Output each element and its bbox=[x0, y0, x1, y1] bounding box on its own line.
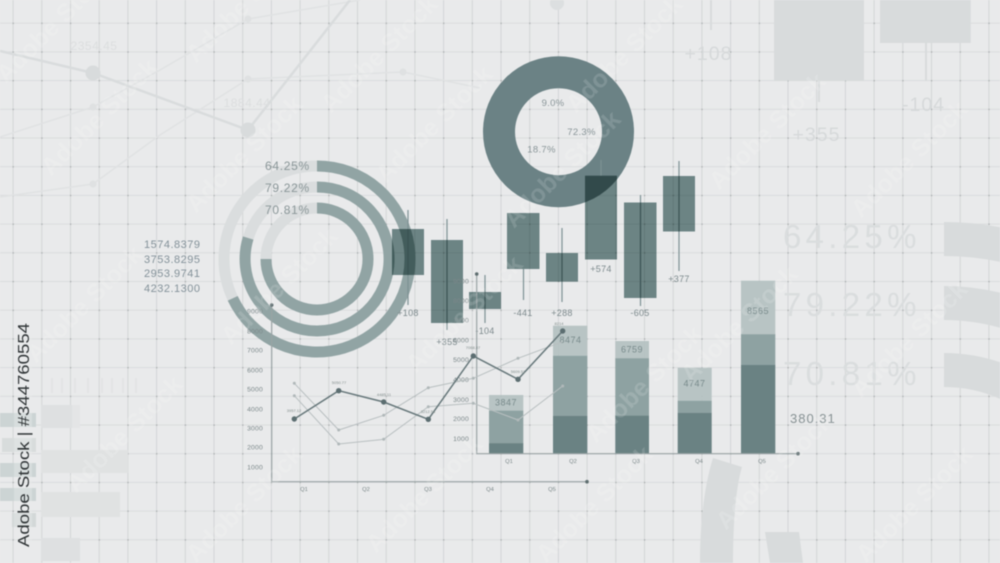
line chart: primary series: 7068.87 bbox=[466, 345, 481, 350]
watermarks: Adobe Stock bbox=[498, 105, 626, 233]
candlestick chart: -605 bbox=[630, 308, 650, 318]
bar chart axes and labels: Q2 bbox=[569, 459, 577, 465]
bar chart axes and labels: 1000 bbox=[453, 436, 469, 443]
line chart: primary series: 8214 bbox=[555, 321, 564, 326]
ghost percentages: right bbox=[783, 218, 921, 392]
watermarks: Adobe Stock bbox=[845, 275, 973, 403]
bar chart axes and labels: 6000 bbox=[453, 338, 469, 344]
ring percentage labels bbox=[265, 159, 310, 217]
bar chart axes and labels: 9000 bbox=[453, 278, 469, 286]
bar chart: stacked quarterly bars: 8474 bbox=[559, 335, 582, 345]
ghost line chart: top left: 1884.44 bbox=[224, 96, 270, 110]
line chart axes and labels: 7000 bbox=[247, 348, 263, 354]
watermarks: Adobe Stock bbox=[370, 60, 498, 188]
line chart axes and labels bbox=[247, 303, 589, 493]
ghost line chart: top left: 2354.45 bbox=[71, 39, 117, 53]
line chart: primary series: 3212.56 bbox=[421, 409, 436, 414]
watermarks: Adobe Stock bbox=[710, 407, 838, 535]
watermarks: Adobe Stock bbox=[580, 320, 708, 448]
watermarks: Adobe Stock bbox=[675, 260, 803, 388]
candlestick chart: -441 bbox=[513, 308, 533, 318]
line chart axes and labels: Q2 bbox=[362, 487, 370, 493]
bar chart: stacked quarterly bars: 3847 bbox=[495, 398, 517, 408]
donut chart bbox=[499, 72, 618, 191]
bar chart axes and labels: 7000 bbox=[453, 318, 469, 324]
line chart axes and labels: 1000 bbox=[247, 464, 263, 472]
bar chart axes and labels: Q1 bbox=[505, 459, 513, 465]
bar chart: stacked quarterly bars: 6759 bbox=[621, 344, 643, 354]
bar chart axes and labels bbox=[453, 272, 800, 465]
line chart: primary series: 5609.51 bbox=[511, 369, 526, 374]
ghost candlesticks: top right bbox=[685, 0, 971, 146]
bar chart: stacked quarterly bars: 8565 bbox=[747, 306, 769, 316]
bar chart axes and labels: Q5 bbox=[758, 459, 766, 465]
candlestick chart: +377 bbox=[668, 274, 690, 284]
value list: 1574.8379 bbox=[144, 239, 200, 251]
ghost ring arcs: right edge bbox=[944, 239, 1000, 391]
watermarks: Adobe Stock bbox=[360, 430, 488, 558]
ghost percentages: right: 79.22% bbox=[783, 286, 921, 323]
donut chart: 72.3% bbox=[567, 127, 596, 138]
line chart: secondary series bbox=[293, 342, 564, 446]
ring percentage labels: 79.22% bbox=[265, 181, 310, 195]
bar chart axes and labels: 4000 bbox=[453, 377, 469, 384]
bar chart: stacked quarterly bars: 4747 bbox=[683, 378, 706, 388]
bar chart axes and labels: 2000 bbox=[453, 416, 469, 423]
stock id label: Adobe Stock | #344760554 bbox=[16, 323, 33, 547]
candlestick chart bbox=[392, 160, 695, 347]
watermarks: Adobe Stock bbox=[703, 67, 831, 195]
bar chart axes and labels: Q3 bbox=[632, 459, 640, 465]
line chart axes and labels: 3000 bbox=[247, 426, 263, 432]
watermarks: Adobe Stock bbox=[20, 240, 148, 368]
bar chart axes and labels: Q4 bbox=[695, 459, 704, 465]
bar chart: stacked quarterly bars bbox=[489, 281, 775, 454]
watermarks: Adobe Stock bbox=[60, 370, 188, 498]
ring percentage labels: 64.25% bbox=[265, 159, 310, 173]
line chart axes and labels: Q1 bbox=[300, 487, 308, 493]
line chart: primary series: 5050.77 bbox=[332, 380, 347, 385]
ghost candlesticks: top right: +355 bbox=[793, 124, 840, 146]
value list: 4232.1300 bbox=[144, 283, 200, 295]
donut chart: 9.0% bbox=[542, 98, 565, 109]
line chart axes and labels: 2000 bbox=[247, 444, 263, 452]
line chart: primary series: 4485.11 bbox=[377, 392, 392, 397]
line chart axes and labels: 5000 bbox=[247, 386, 263, 394]
line chart: primary series: 3957.12 bbox=[287, 408, 302, 413]
line chart axes and labels: 9000 bbox=[247, 308, 263, 316]
line chart axes and labels: Q3 bbox=[424, 487, 432, 493]
line chart: primary series bbox=[287, 321, 565, 422]
watermarks: Adobe Stock bbox=[180, 90, 308, 218]
value list bbox=[144, 239, 200, 295]
watermarks: Adobe Stock bbox=[400, 250, 528, 378]
ghost percentages: right: 70.81% bbox=[783, 355, 921, 392]
ghost percentages: right: 64.25% bbox=[783, 218, 921, 255]
candlestick chart: +288 bbox=[551, 308, 573, 318]
watermarks: Adobe Stock bbox=[215, 222, 343, 350]
ghost candlesticks: top right: -104 bbox=[902, 94, 945, 116]
ghost horizontal bars: left edge bbox=[0, 378, 136, 561]
line chart axes and labels: 4000 bbox=[247, 406, 263, 414]
watermarks: Adobe Stock bbox=[35, 53, 163, 181]
candlestick chart: +108 bbox=[397, 308, 419, 318]
line chart axes and labels: 6000 bbox=[247, 368, 263, 374]
bar chart axes and labels: 3000 bbox=[453, 397, 469, 404]
donut chart: 18.7% bbox=[527, 144, 556, 156]
line chart axes and labels: Q5 bbox=[548, 487, 556, 493]
line chart axes and labels: 8000 bbox=[247, 328, 263, 336]
bar chart axes and labels: 5000 bbox=[453, 357, 469, 364]
value list: 2953.9741 bbox=[144, 268, 200, 280]
ghost candlesticks: top right: +108 bbox=[685, 43, 732, 65]
ring chart: three progress rings bbox=[224, 166, 410, 352]
readout value: 380.31 bbox=[790, 411, 836, 426]
candlestick chart: +355 bbox=[436, 337, 458, 347]
line chart axes and labels: Q4 bbox=[486, 487, 495, 493]
candlestick chart: +574 bbox=[590, 264, 612, 274]
ghost line chart: top left bbox=[0, 0, 564, 197]
value list: 3753.8295 bbox=[144, 254, 200, 266]
candlestick chart: -104 bbox=[475, 326, 495, 336]
watermarks: Adobe Stock bbox=[845, 95, 973, 223]
ghost ring arcs: bottom bbox=[700, 458, 803, 563]
ring percentage labels: 70.81% bbox=[265, 203, 310, 217]
bar chart axes and labels: 8000 bbox=[453, 298, 469, 305]
